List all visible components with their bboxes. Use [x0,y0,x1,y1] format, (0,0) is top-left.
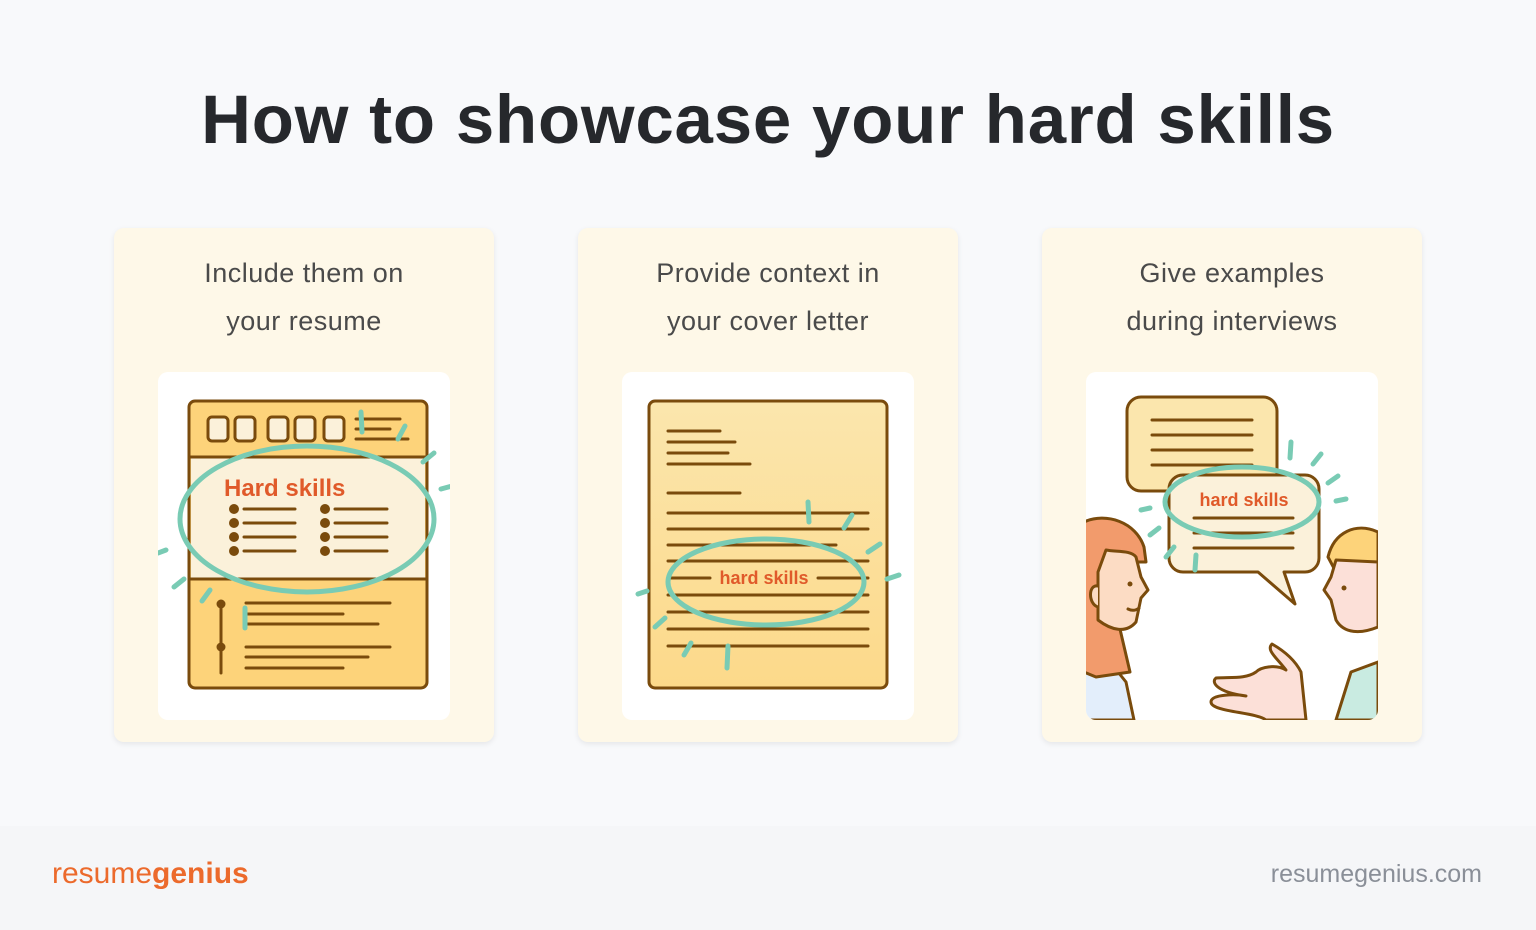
heading: resume [204,258,404,336]
heading: cover letter: your cover letter [667,306,869,336]
url: resumegenius.com [1271,860,1482,888]
heading: interviews: Give examples [1139,258,1325,288]
illustration: interviews: hard skills [1199,490,1289,510]
illustration: interviews [1086,372,1378,720]
footer [0,826,1536,930]
panel: cover letter [578,228,958,742]
heading: interviews: during interviews [1126,306,1338,336]
panel: interviews [1042,228,1422,742]
heading: cover letter [656,258,880,336]
illustration: resume: Hard skills [224,475,345,502]
heading: resume: your resume [226,306,382,336]
illustration: resume [158,372,450,720]
woman [1084,652,1134,720]
heading: interviews [1126,258,1338,336]
heading: cover letter: Provide context in [656,258,880,288]
illustration: cover letter: hard skills [719,568,809,588]
heading: resume: Include them on [204,258,404,288]
hand [1211,644,1306,720]
panel: resume [114,228,494,742]
illustration: cover letter [622,372,914,720]
title: How to showcase your hard skills [201,81,1335,158]
man [1336,662,1378,720]
logo: resumegenius [52,857,249,890]
